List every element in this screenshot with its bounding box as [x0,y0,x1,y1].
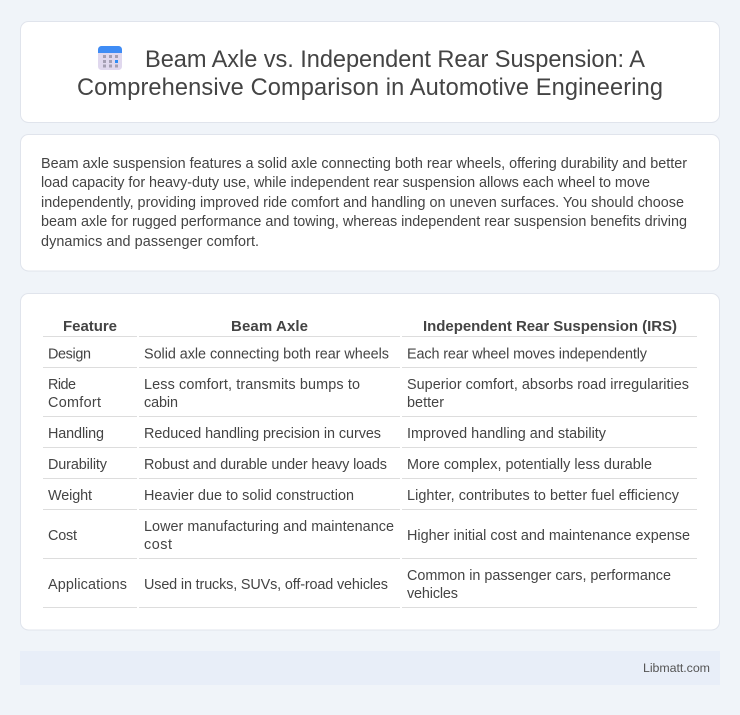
row: handling: Reduced handling precision in curves [144,426,381,442]
row: durability: More complex, potentially less durable [407,457,652,473]
text block: summary: Beam axle suspension features a solid axle connecting both rear wheels, offering durability and better [41,156,687,172]
row: handling [48,426,607,442]
table header: Independent Rear Suspension (IRS) [423,318,677,335]
footer: Libmatt.com [643,661,710,675]
row: ride comfort: Comfort [48,395,101,411]
footer [20,651,720,685]
row: weight: Heavier due to solid construction [144,488,354,504]
panel: introduction [20,134,720,271]
title [77,47,663,101]
row: applications [48,568,671,602]
row: durability [48,457,652,473]
row: applications: Applications [48,577,127,593]
row: durability: Durability [48,457,108,473]
row: ride comfort: better [407,395,444,411]
row: cost: Higher initial cost and maintenance expense [407,528,690,544]
row: weight [48,488,680,504]
text block: summary: independently, providing improved ride comfort and handling on uneven surfaces. You should choose [41,195,684,211]
panel: header [20,22,720,122]
row: design [48,346,648,362]
row: ride comfort [48,377,689,411]
row: ride comfort: Ride [48,377,76,393]
row: applications: Used in trucks, SUVs, off-road vehicles [144,577,388,593]
row: design: Design [48,346,91,362]
table header: Beam Axle [231,318,308,335]
row: ride comfort: Superior comfort, absorbs road irregularities [407,377,689,393]
row: design: Each rear wheel moves independently [407,346,648,362]
text block: summary: beam axle for rugged performance and towing, whereas independent rear suspension benefits driving [41,214,687,230]
row: ride comfort: Less comfort, transmits bumps to [144,377,360,393]
text block: summary [41,156,687,250]
title: Comprehensive Comparison in Automotive Engineering [77,75,663,101]
row: handling: Improved handling and stability [407,426,607,442]
row: ride comfort: cabin [144,395,178,411]
row: design: Solid axle connecting both rear wheels [144,346,389,362]
row: applications: Common in passenger cars, performance [407,568,671,584]
table header: Feature [63,318,117,335]
text block: summary: dynamics and passenger comfort. [41,234,259,250]
icon: calendar [98,46,122,70]
row: applications: vehicles [407,586,458,602]
row: weight: Weight [48,488,92,504]
text block: summary: load capacity for heavy-duty use, while independent rear suspension allows each wheel to move [41,175,650,191]
table header [63,318,677,335]
row: durability: Robust and durable under heavy loads [144,457,387,473]
panel: comparison table [20,294,720,630]
row: cost: cost [144,537,172,553]
row: cost [48,519,690,553]
row: weight: Lighter, contributes to better fuel efficiency [407,488,680,504]
title: Beam Axle vs. Independent Rear Suspension: A [145,47,645,73]
row: cost: Lower manufacturing and maintenance [144,519,394,535]
row: cost: Cost [48,528,77,544]
row: handling: Handling [48,426,104,442]
